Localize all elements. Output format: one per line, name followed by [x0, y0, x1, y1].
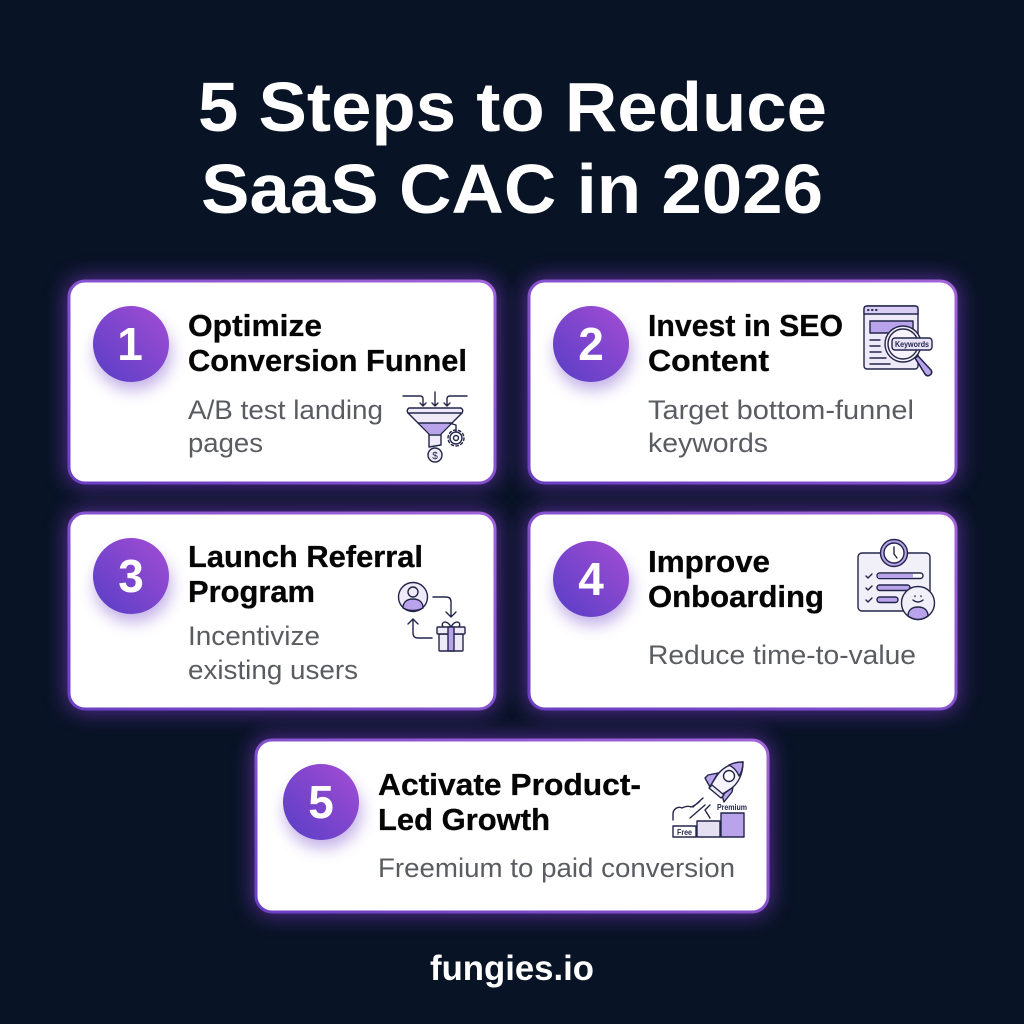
icon: rocket growth: Free — [677, 828, 692, 837]
heading 5: Activate Product- — [378, 767, 641, 802]
step number 5 — [283, 764, 359, 840]
step number 1 — [93, 306, 169, 382]
panel: step 4 — [526, 510, 959, 712]
step number 3 — [93, 538, 169, 614]
description 4: Reduce time-to-value — [648, 640, 916, 670]
icon: rocket growth: Premium — [717, 803, 747, 812]
heading 5: Led Growth — [378, 802, 550, 837]
panel: step 1 — [66, 278, 498, 486]
heading 4: Onboarding — [648, 579, 824, 614]
description 2 — [648, 395, 914, 458]
heading 5 — [378, 767, 641, 837]
heading 1: Conversion Funnel — [188, 343, 467, 378]
icon: keywords search — [864, 306, 932, 376]
description 2: keywords — [648, 428, 768, 458]
title: SaaS CAC in 2026 — [201, 150, 823, 228]
icon: referral gift — [398, 582, 465, 651]
step number 1: 1 — [117, 318, 143, 370]
description 2: Target bottom-funnel — [648, 395, 914, 425]
icon: keywords search: Keywords — [895, 340, 929, 349]
heading 3 — [188, 539, 423, 609]
description 3 — [188, 621, 358, 685]
heading 4 — [648, 544, 824, 614]
heading 1: Optimize — [188, 308, 322, 343]
description 3: existing users — [188, 655, 358, 685]
heading 3: Launch Referral — [188, 539, 423, 574]
heading 3: Program — [188, 574, 315, 609]
icon: funnel: $ — [432, 451, 438, 462]
icon: rocket growth — [673, 762, 747, 837]
description 3: Incentivize — [188, 621, 320, 651]
heading 4: Improve — [648, 544, 770, 579]
step number 5: 5 — [308, 776, 334, 828]
heading 2 — [648, 308, 843, 378]
description 1: pages — [188, 428, 263, 458]
step number 4 — [553, 541, 629, 617]
icon: funnel — [403, 392, 467, 462]
step number 2 — [553, 306, 629, 382]
heading 2: Invest in SEO — [648, 308, 843, 343]
panel: step 5 — [253, 737, 771, 915]
title: 5 Steps to Reduce — [198, 68, 827, 146]
step number 3: 3 — [118, 550, 144, 602]
icon: onboarding checklist — [858, 540, 934, 620]
step number 2: 2 — [578, 318, 604, 370]
description 5: Freemium to paid conversion — [378, 853, 735, 883]
panel: step 3 — [66, 510, 498, 712]
heading 1 — [188, 308, 467, 378]
title — [198, 68, 827, 228]
footer brand: fungies.io — [430, 949, 594, 988]
description 1 — [188, 395, 383, 458]
step number 4: 4 — [578, 553, 604, 605]
heading 2: Content — [648, 343, 769, 378]
panel: step 2 — [526, 278, 959, 486]
description 1: A/B test landing — [188, 395, 383, 425]
